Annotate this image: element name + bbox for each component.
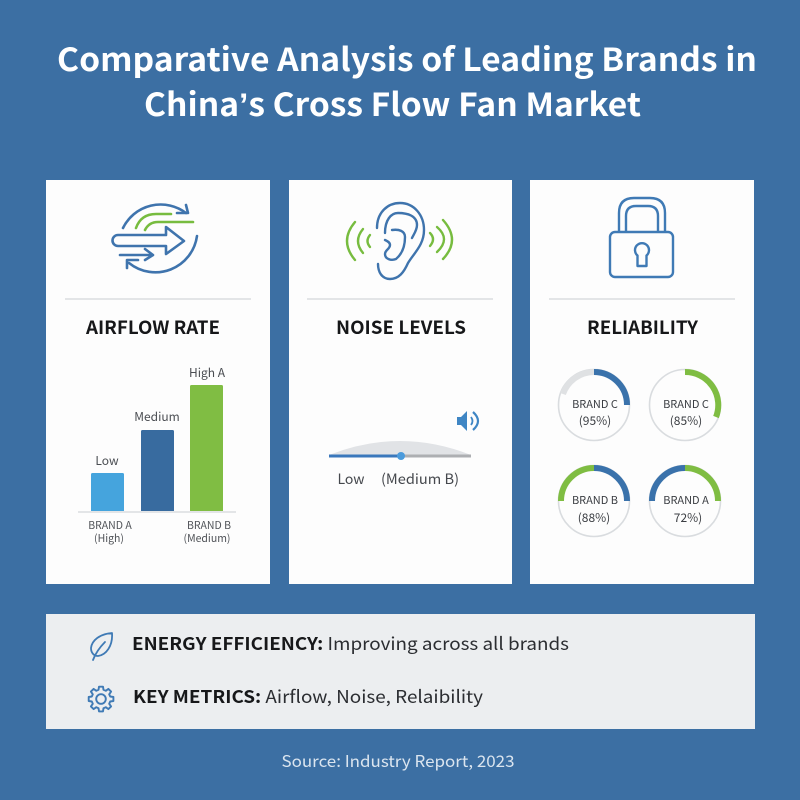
ring: Brand B 88%: [558, 466, 630, 536]
noise slider: Low: [337, 469, 365, 489]
energy efficiency line: ENERGY EFFICIENCY: Improving across all brands: [132, 631, 569, 656]
bar chart: BRAND A: [88, 518, 132, 533]
panel: airflow rate: [46, 180, 270, 584]
ring: Brand A 72%: BRAND A: [663, 492, 709, 508]
ring: Brand C 85%: BRAND C: [663, 396, 709, 412]
ring: Brand A 72%: 72%): [674, 509, 702, 526]
panel: summary: [46, 614, 755, 729]
ring: Brand A 72%: [650, 466, 720, 536]
icon: speaker: [457, 411, 478, 431]
heading: AIRFLOW RATE: [85, 314, 220, 340]
noise slider: [329, 441, 471, 489]
ring: Brand C 85%: [650, 370, 720, 440]
icon: ear with sound waves: [347, 203, 452, 279]
title: [57, 35, 757, 126]
bar chart: (High): [94, 531, 124, 546]
heading: RELIABILITY: [587, 314, 698, 340]
bar chart: BRAND B: [187, 518, 231, 533]
icon: padlock: [610, 198, 673, 277]
bar chart: (Medium): [184, 531, 230, 546]
ring: Brand C 95%: [558, 370, 630, 440]
icon: gear: [89, 687, 113, 711]
heading: NOISE LEVELS: [336, 314, 466, 340]
icon: airflow arrows: [112, 205, 197, 272]
title: China’s Cross Flow Fan Market: [144, 80, 641, 126]
source: Source: Industry Report, 2023: [282, 748, 514, 772]
bar chart: Medium: [134, 408, 180, 425]
ring: Brand C 85%: (85%): [670, 412, 702, 429]
bar chart: Low: [95, 452, 119, 469]
bar chart: [78, 364, 236, 546]
ring: Brand C 95%: BRAND C: [572, 396, 618, 412]
ring: Brand B 88%: (88%): [578, 509, 610, 526]
noise slider: (Medium B): [381, 469, 459, 489]
ring: Brand B 88%: BRAND B: [572, 492, 618, 508]
ring: Brand C 95%: (95%): [579, 412, 611, 429]
title: Comparative Analysis of Leading Brands in: [57, 35, 757, 81]
key metrics line: KEY METRICS: Airflow, Noise, Relaibility: [133, 684, 483, 709]
icon: leaf: [91, 633, 112, 660]
panel: reliability: [530, 180, 754, 584]
bar chart: High A: [189, 364, 226, 381]
panel: noise levels: [289, 180, 512, 584]
